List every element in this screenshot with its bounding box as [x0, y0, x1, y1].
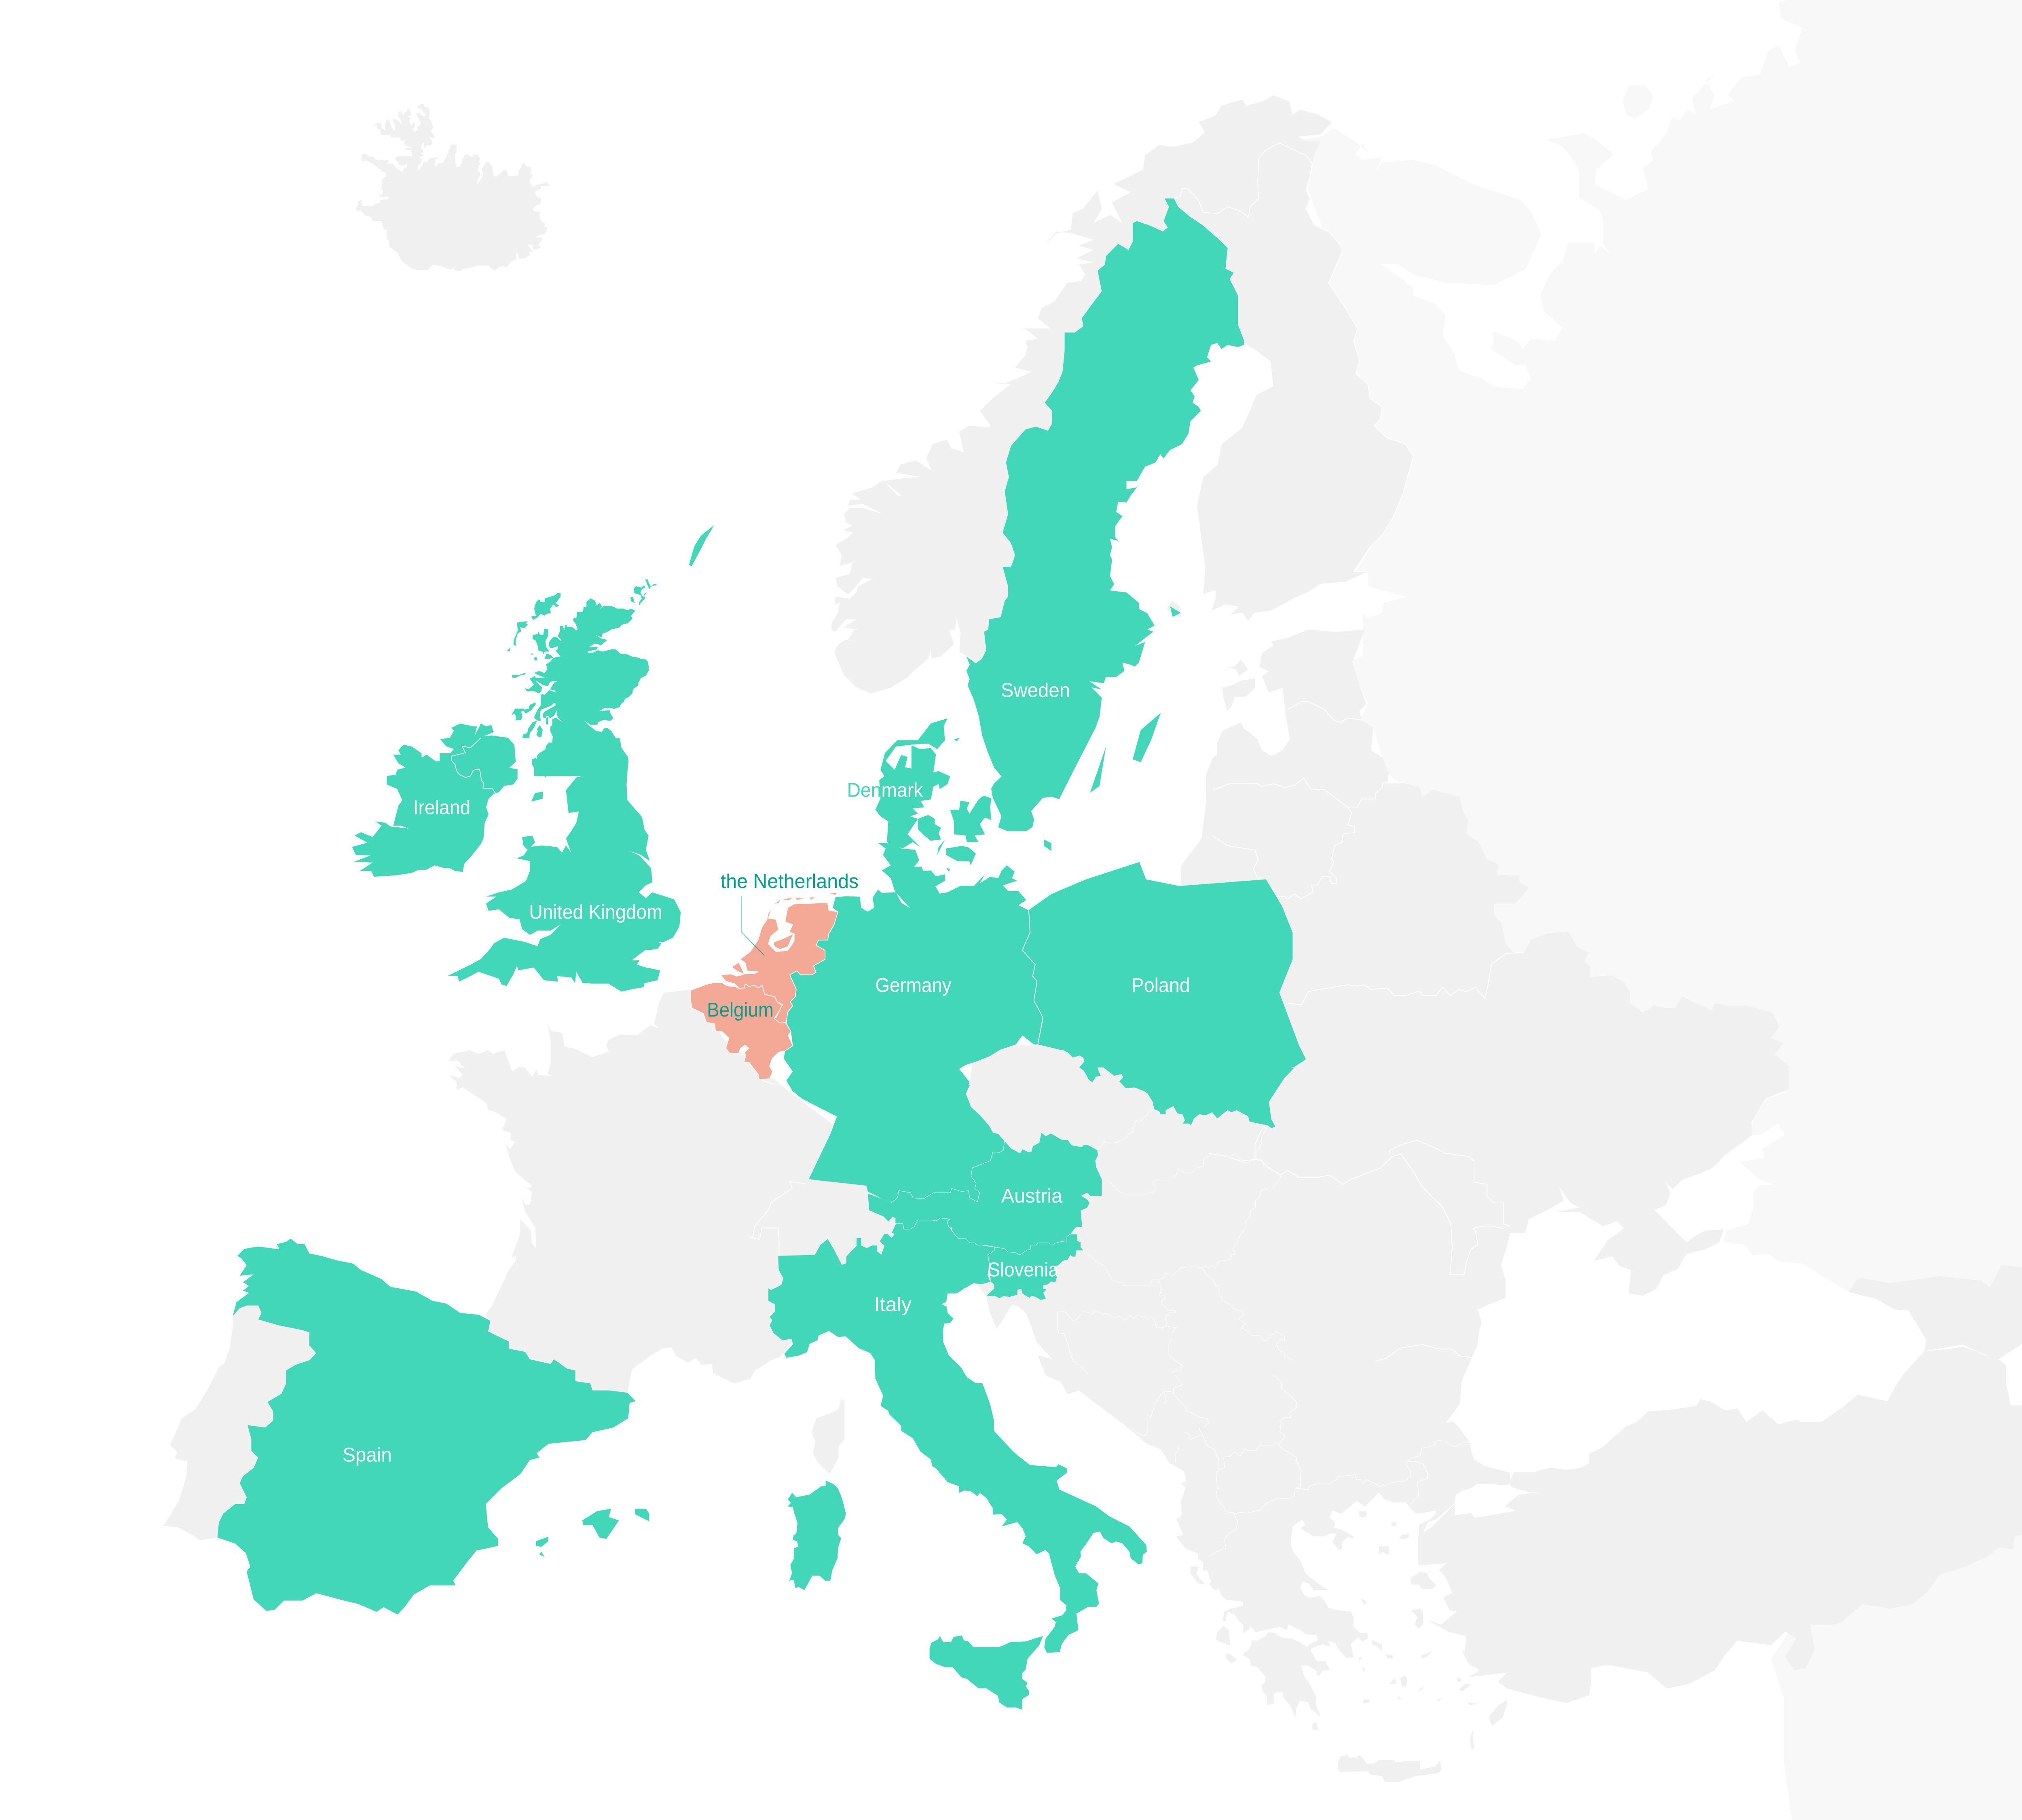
- gray land: Croatia and the Adriatic coast: [949, 1045, 1207, 1448]
- country: United Kingdom, England and Wales: [447, 759, 681, 991]
- gray land: Norway and Finland: [831, 95, 1413, 693]
- label: Belgium: Belgium: [707, 999, 774, 1021]
- label: Spain: Spain: [343, 1444, 392, 1466]
- country: Sweden, islands of Gotland and Öland: [1090, 606, 1181, 793]
- country: Slovenia: [986, 1234, 1083, 1300]
- white borders between green countries: [891, 1141, 1070, 1285]
- country: Ireland: [352, 723, 518, 877]
- country: Austria: [868, 1133, 1102, 1255]
- gray land: Baltics, Belarus, Ukraine, Romania and central Europe: [1153, 625, 1789, 1334]
- label: Denmark: Denmark: [847, 779, 923, 801]
- faint background land: southern Russia and the Middle East: [1421, 835, 2022, 1820]
- label: Sweden: Sweden: [1001, 679, 1070, 701]
- gray land: Turkey and the Caucasus: [1418, 1265, 2022, 1703]
- label: Ireland: Ireland: [413, 796, 470, 818]
- country: Denmark: [876, 718, 1051, 872]
- label: Slovenia: Slovenia: [988, 1259, 1059, 1281]
- label: the Netherlands: the Netherlands: [721, 870, 859, 892]
- label: Austria: Austria: [1001, 1185, 1063, 1207]
- country: Sweden: [967, 199, 1244, 831]
- white borders: central Europe: [1058, 1110, 1294, 1375]
- leader line: the Netherlands: [741, 896, 764, 955]
- gray land: Iceland: [355, 104, 550, 271]
- country: Germany: [784, 843, 1043, 1203]
- white borders: Balkans: [1132, 1375, 1471, 1556]
- border: Germany and Poland: [1022, 910, 1043, 1044]
- country: Italy: [768, 1218, 1147, 1710]
- country: Spain: [218, 1239, 649, 1615]
- white borders: Romania and Bulgaria: [1375, 1344, 1478, 1361]
- white borders: Baltics, Belarus and Ukraine: [1209, 702, 1524, 1275]
- country: Poland: [1022, 862, 1306, 1128]
- label: Poland: Poland: [1132, 974, 1190, 996]
- label: Germany: Germany: [875, 974, 952, 996]
- country: United Kingdom, Isle of Man and Anglesey: [522, 792, 543, 850]
- country: the Netherlands: [721, 893, 838, 1023]
- country: Belgium: [690, 983, 793, 1080]
- gray land: France and Switzerland: [163, 990, 906, 1540]
- gray land: Balkans and Greece: [1104, 1318, 1511, 1782]
- faint background land: northern Russia: [1304, 0, 2022, 836]
- country: United Kingdom, Scotland and its islands: [507, 579, 658, 776]
- country: United Kingdom, Shetland: [689, 525, 714, 566]
- white borders: Switzerland and Luxembourg: [750, 1080, 806, 1254]
- label: United Kingdom: United Kingdom: [529, 901, 662, 923]
- label: Italy: Italy: [874, 1293, 912, 1315]
